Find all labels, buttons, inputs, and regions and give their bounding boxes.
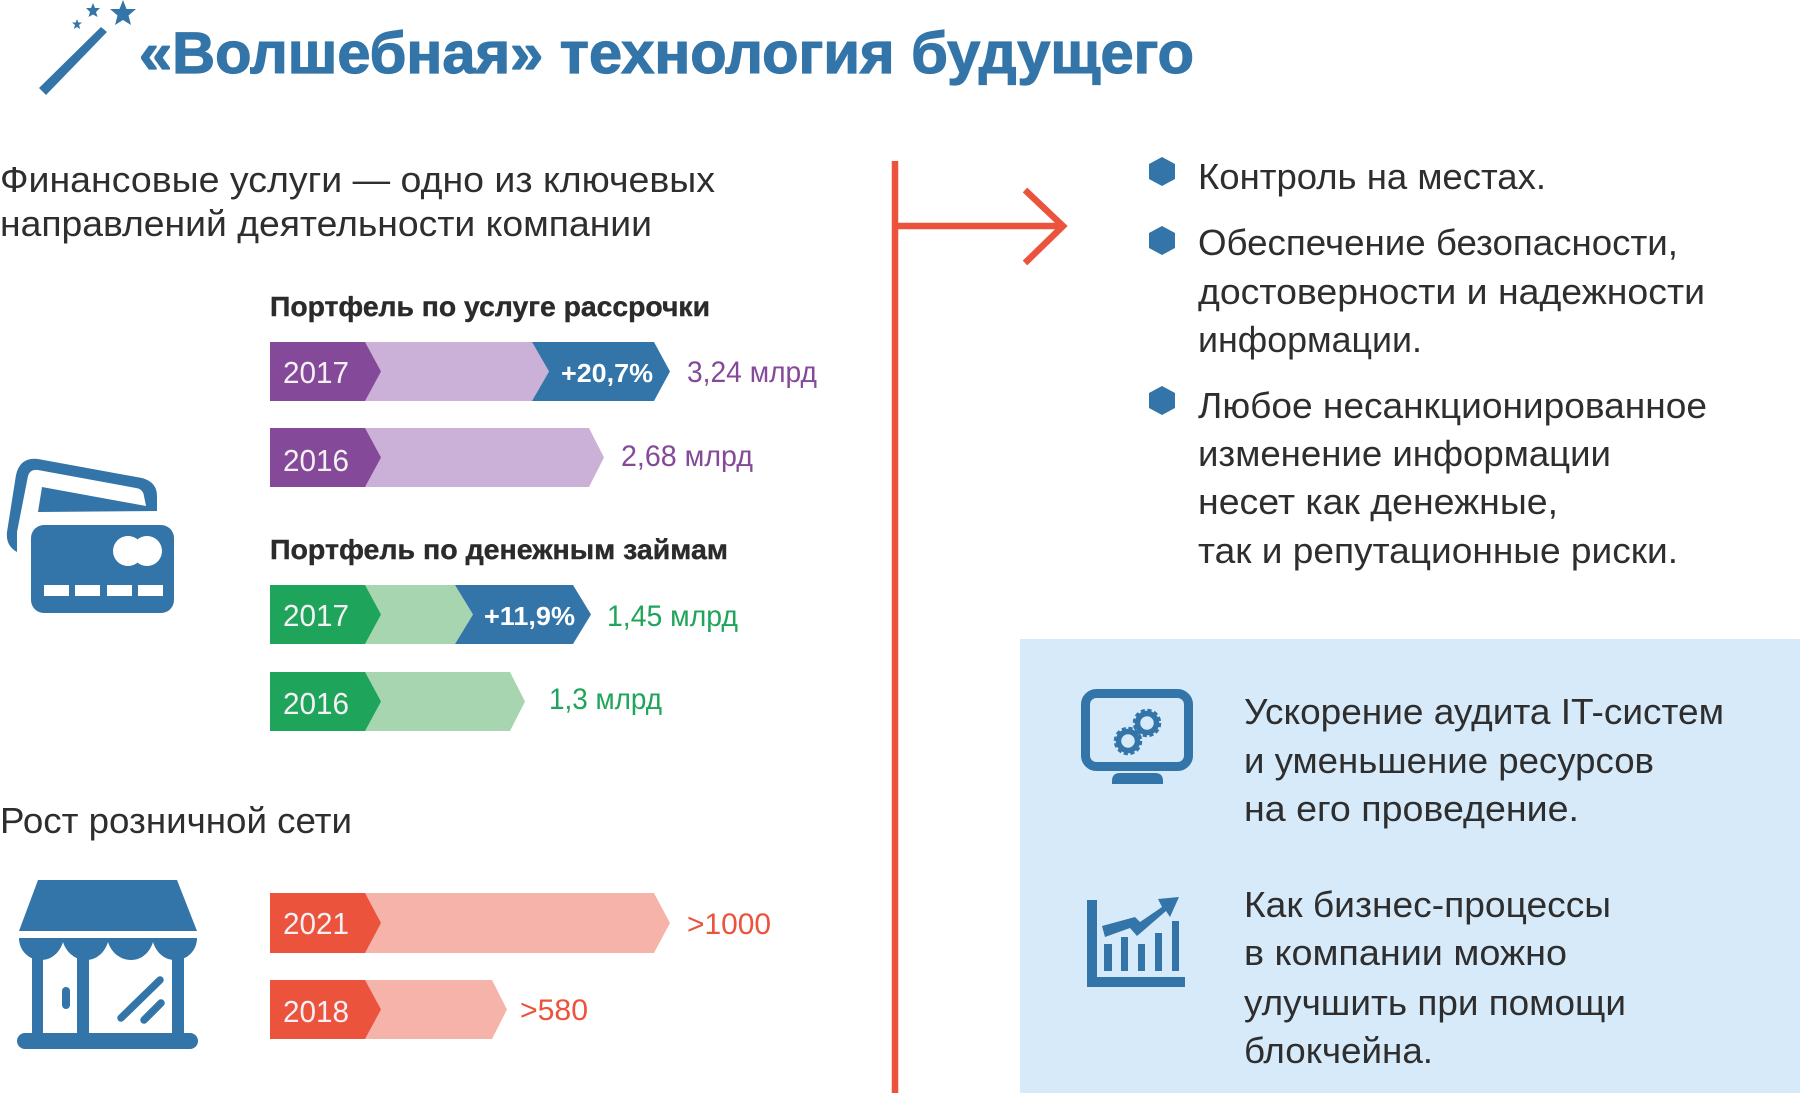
bullet: data security: информации. xyxy=(1198,319,1422,360)
text block: business process improvement: в компании можно xyxy=(1244,932,1567,973)
bullet: on-site control: Контроль на местах. xyxy=(1198,156,1546,197)
text block: IT audit acceleration: на его проведение. xyxy=(1244,788,1579,829)
icon: growth chart xyxy=(1087,897,1185,987)
text block: business process improvement: блокчейна. xyxy=(1244,1030,1433,1071)
bar: 2016 loans: 1,3 млрд xyxy=(549,683,662,716)
bullet: unauthorized change risks: Любое несанкционированное xyxy=(1198,385,1707,426)
bar: 2018 stores: >580 xyxy=(520,994,588,1027)
heading: cash loans portfolio: Портфель по денежным займам xyxy=(270,534,728,565)
bullet: data security: достоверности и надежности xyxy=(1198,271,1705,312)
icon: magic wand xyxy=(39,0,136,95)
text block: financial services intro: Финансовые услуги — одно из ключевых xyxy=(0,159,715,200)
icon: credit cards xyxy=(7,459,174,613)
bullet: unauthorized change risks xyxy=(1149,385,1707,571)
bar: 2021 stores: 2021 xyxy=(283,906,349,941)
bullet: unauthorized change risks: так и репутационные риски. xyxy=(1198,530,1678,571)
title: «Волшебная» технология будущего xyxy=(139,21,1194,86)
bar: 2017 installment: 2017 xyxy=(283,355,349,390)
icon: store xyxy=(17,880,198,1049)
bar chart: retail network xyxy=(270,893,771,1039)
bullet: unauthorized change risks: изменение информации xyxy=(1198,433,1611,474)
bar: 2017 loans: 1,45 млрд xyxy=(607,600,738,633)
bullet: unauthorized change risks: несет как денежные, xyxy=(1198,481,1558,522)
icon: monitor with gears xyxy=(1086,694,1188,784)
bar: 2017 loans xyxy=(270,585,738,644)
bar chart: installment portfolio xyxy=(270,342,817,487)
bullet: data security xyxy=(1149,222,1705,360)
heading: installment portfolio: Портфель по услуге рассрочки xyxy=(270,291,710,322)
bar: 2017 installment: 3,24 млрд xyxy=(687,356,817,389)
text block: business process improvement: улучшить при помощи xyxy=(1244,982,1626,1023)
bullet list: risks and control xyxy=(1149,156,1707,571)
bar: 2017 loans: +11,9% xyxy=(484,601,575,631)
bar: 2016 installment: 2016 xyxy=(283,443,349,478)
text block: IT audit acceleration xyxy=(1244,691,1724,829)
text block: business process improvement xyxy=(1244,884,1626,1071)
text block: IT audit acceleration: Ускорение аудита IT-систем xyxy=(1244,691,1724,732)
bar: 2018 stores: 2018 xyxy=(283,994,349,1029)
bar: 2018 stores xyxy=(270,980,588,1039)
bar: 2021 stores xyxy=(270,893,771,953)
heading: retail network growth: Рост розничной сети xyxy=(0,800,352,841)
text block: financial services intro xyxy=(0,159,715,244)
arrow: red divider pointing right xyxy=(895,161,1063,1093)
panel: light blue benefits background xyxy=(1020,639,1800,1093)
bar: 2017 installment: +20,7% xyxy=(561,358,653,388)
bar: 2016 loans: 2016 xyxy=(283,686,349,721)
bar chart: cash loans portfolio xyxy=(270,585,738,731)
bar: 2017 installment xyxy=(270,342,817,401)
text block: business process improvement: Как бизнес-процессы xyxy=(1244,884,1611,925)
text block: IT audit acceleration: и уменьшение ресурсов xyxy=(1244,740,1654,781)
bar: 2016 loans xyxy=(270,672,662,731)
bar: 2017 loans: 2017 xyxy=(283,598,349,633)
bar: 2016 installment xyxy=(270,428,753,487)
bullet: data security: Обеспечение безопасности, xyxy=(1198,222,1678,263)
bar: 2016 installment: 2,68 млрд xyxy=(621,440,753,473)
bar: 2021 stores: >1000 xyxy=(687,908,771,941)
text block: financial services intro: направлений деятельности компании xyxy=(0,203,652,244)
